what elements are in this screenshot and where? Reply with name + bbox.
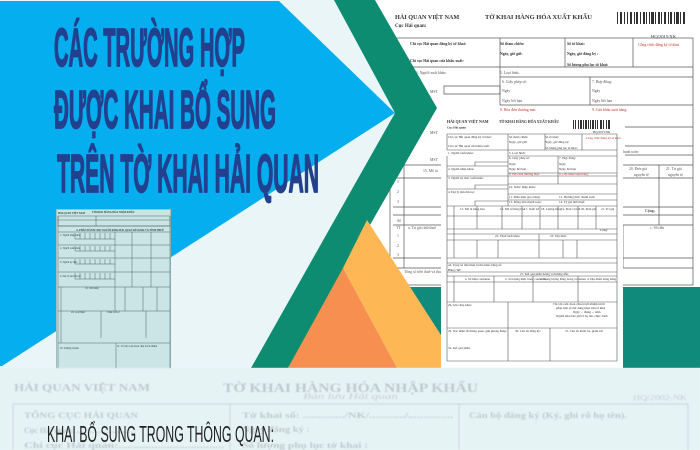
document: export declaration, front sheet: b. Số lượng kiện trong container [505, 277, 547, 281]
document: export declaration, front sheet: 22. Thuế xuất khẩu [495, 233, 520, 238]
bottom panel: import declaration, faded: TỜ KHAI HÀNG HÓA NHẬP KHẨU [223, 380, 478, 395]
document: export declaration, back sheet: 15. Mô tả [423, 169, 438, 173]
document: export declaration, front sheet: c. Trọng lượng hàng trong container [540, 277, 587, 281]
document: export declaration, back sheet: nguyên tệ [634, 173, 649, 177]
document: export declaration, back sheet: 9. Cửa khẩu xuất hàng: [592, 107, 627, 112]
document: export declaration, front sheet: Ngày [559, 162, 566, 166]
document: export declaration, front sheet: Ngày ... tháng ... năm [573, 310, 601, 314]
document: export declaration, front sheet: 17. Xuất xứ [524, 207, 539, 211]
document: export declaration, front sheet: 20. Đơn giá [581, 207, 597, 211]
text: ĐƯỢC KHAI BỔ SUNG [54, 80, 276, 140]
document: export declaration, front sheet: 11. Điều kiện giao hàng: [509, 195, 540, 199]
thumbnail: customs form photo: HẢI QUAN VIỆT NAM [58, 212, 85, 215]
document: export declaration, front sheet: 14. Tỷ giá tính thuế: [559, 200, 585, 204]
document: export declaration, front sheet: 24. Tổng số tiền thuế và thu khác bằng số: [448, 262, 502, 267]
yellow triangle [343, 220, 441, 368]
document: export declaration, front sheet: 31. Cán bộ kiểm tra, giám sát: [565, 328, 604, 334]
document: export declaration, back sheet [370, 0, 700, 287]
document: export declaration, front sheet: Số tờ khai: [545, 135, 559, 139]
document: export declaration, front sheet: Bằng chữ: [448, 267, 461, 272]
document: export declaration, front sheet: 29. Xác nhận đã thông quan, giải phóng hàng: [448, 329, 507, 334]
document: export declaration, front sheet: 19. Đơn vị tính [561, 207, 581, 211]
document: export declaration, back sheet: Chi cục Hải quan cửa khẩu xuất: [410, 58, 464, 63]
document: export declaration, back sheet: Ngày [502, 89, 510, 93]
document: export declaration, back sheet: 3 [397, 253, 399, 257]
thumbnail: customs form photo: 2. Người xuất khẩu [60, 247, 81, 250]
document: export declaration, back sheet: c. Số tiền [650, 226, 664, 230]
document: export declaration, front sheet: 23. Thu khác [550, 234, 567, 238]
document: export declaration, front sheet: 7. Hợp đồng: [559, 156, 576, 160]
document: export declaration, front sheet: 3. Người ủy thác xuất khẩu: [448, 175, 484, 180]
document: export declaration, front sheet: 9. Cửa khẩu xuất hàng: [559, 171, 589, 176]
document: export declaration, back sheet: 2 [397, 244, 399, 248]
document: export declaration, back sheet: 7. Hợp đồng: [592, 80, 612, 84]
document: export declaration, back sheet: Chi cục Hải quan đăng ký tờ khai: [410, 42, 466, 46]
teal block: behind triangles [405, 287, 441, 368]
document: export declaration, front sheet: Chi cục Hải quan cửa khẩu xuất: [448, 143, 490, 148]
document: export declaration, back sheet: TỜ KHAI HÀNG HÓA XUẤT KHẨU [485, 13, 593, 21]
orange triangle [288, 268, 397, 368]
document: export declaration, back sheet: Cộng: [645, 209, 655, 213]
bottom panel: import declaration, faded: Tờ khai số: ............../NK/............/............... [242, 411, 453, 420]
document: export declaration, back sheet: 1. Người xuất khẩu: [416, 70, 446, 75]
document: export declaration, back sheet: MST [430, 90, 438, 94]
document: export declaration, back sheet: Tổng số tiền thuế và thu khác [404, 269, 449, 274]
document: export declaration, front sheet: 12. Phương thức thanh toán: [559, 195, 595, 199]
document: export declaration, back sheet: 20. Đơn giá [629, 167, 647, 171]
document: export declaration, front sheet: 4. Đại lý làm thủ tục: [448, 190, 475, 194]
thumbnail: customs form photo: 3. Người ủy thác [60, 261, 78, 264]
bottom panel: import declaration, faded: HẢI QUAN VIỆT NAM [14, 381, 151, 394]
document: export declaration, front sheet: Tôi xin cam đoan chịu trách nhiệm trước [553, 302, 606, 306]
document: export declaration, back sheet: nguyên tệ [668, 173, 683, 177]
bottom panel: import declaration, faded: Chi cục Hải quan:................................... [24, 441, 224, 450]
document: export declaration, front sheet: Ngày, giờ gửi: [509, 140, 527, 145]
thumbnail: customs form photo: TỜ KHAI HÀNG HÓA NHẬP KHẨU [92, 210, 135, 214]
document: export declaration, back sheet: Số tờ khai: [567, 42, 585, 46]
document: export declaration, back sheet: 1 [397, 234, 399, 238]
document: export declaration, back sheet: HQ/2015/XK [651, 34, 677, 39]
thumbnail: customs form photo: 4. Đại lý làm thủ tục [60, 275, 82, 278]
title [54, 18, 319, 204]
green chevron [251, 0, 437, 368]
bottom panel: import declaration, faded: Ngày đăng ký : [242, 425, 310, 434]
bottom panel: import declaration, faded: Cán bộ đăng ký (Ký, ghi rõ họ tên). [469, 411, 627, 420]
document: export declaration, back sheet: Số tham chiếu: [500, 42, 524, 46]
thumbnail: customs form photo: 28. Loại thuế [71, 311, 86, 314]
document: export declaration, back sheet: 1 [397, 180, 399, 184]
document: export declaration, back sheet: 3 [397, 200, 399, 204]
teal block: right [623, 287, 700, 368]
document: export declaration, front sheet: HẢI QUAN VIỆT NAM [447, 119, 489, 124]
document: export declaration, front sheet: Số lượng phụ lục tờ khai: [545, 146, 578, 150]
document: export declaration, front sheet: Ngày hết hạn [509, 167, 526, 171]
document: export declaration, front sheet: a. Số hiệu container [465, 277, 491, 281]
thumbnail: customs form photo: A. PHẦN DÀNH CHO NGƯỜI KHAI HẢI QUAN KÊ KHAI VÀ TÍNH THUẾ [76, 229, 164, 232]
document: export declaration, front sheet: 18. Lượng hàng [541, 207, 562, 211]
document: export declaration, front sheet: 13. Đồng tiền thanh toán: [509, 200, 542, 204]
document: export declaration, back sheet: a. Trị giá tính thuế [408, 226, 436, 230]
document: export declaration, back sheet: Ngày hết hạn [592, 99, 612, 103]
document: export declaration, front sheet: 27. Kết quả phân luồng và hướng dẫn: [520, 271, 569, 276]
document: export declaration, front sheet: Công chức đăng ký tờ khai [586, 136, 621, 140]
thumbnail: customs form photo: 18. Tên hàng [85, 287, 99, 290]
document: export declaration, front sheet: 30. Cán bộ đăng ký: [515, 329, 541, 333]
blue arrow panel [0, 1, 395, 366]
document: export declaration, back sheet: Ngày hết hạn [502, 99, 522, 103]
bottom panel: import declaration, faded: Cục Hải quan: .............................. [24, 426, 136, 435]
document: export declaration, front sheet: d. Địa điểm đóng hàng [587, 276, 617, 281]
document: export declaration, front sheet: Ngày hết hạn [559, 167, 576, 171]
thumbnail: customs form photo: 31. Tôi xin cam đoan chịu trách nhiệm [117, 345, 157, 348]
document: export declaration, back sheet: HẢI QUAN VIỆT NAM [395, 13, 459, 21]
title: CÁC TRƯỜNG HỢP [54, 18, 245, 78]
document: export declaration, front sheet: Cục Hải quan [447, 126, 466, 130]
document: export declaration, front sheet: 32. Kết quả phân: [448, 346, 471, 350]
document: export declaration, back sheet: Ngày, giờ gửi: [500, 52, 523, 56]
document: export declaration, front sheet: Người khai báo ghi rõ họ tên, chức danh [556, 314, 608, 319]
document: export declaration, back sheet: 6. Giấy phép số: [502, 80, 527, 84]
thumbnail: customs form photo: 1. Người nhập khẩu [60, 234, 81, 237]
thumbnail: customs form photo: 30. Chứng từ kèm [60, 347, 79, 350]
document: export declaration, front sheet: pháp luật về nội dung khai trên tờ khai [556, 306, 605, 310]
document: export declaration, front sheet: Chi cục Hải quan đăng ký tờ khai: [448, 135, 492, 139]
barcode: front sheet [573, 120, 610, 129]
document: export declaration, back sheet: Công chức đăng ký tờ khai [638, 43, 679, 47]
document: export declaration, back sheet: 8. Hóa đơn thương mại: [500, 108, 536, 112]
bottom panel: import declaration, faded: Số lượng phụ lục tờ khai : [242, 441, 368, 450]
document: export declaration, front sheet: 16. Mã số hàng hóa [500, 207, 526, 211]
document: export declaration, back sheet: TT [396, 226, 401, 230]
document: export declaration, front sheet: HQ/2015/XK [593, 130, 611, 134]
document: export declaration, front sheet: 21. Trị giá [601, 207, 615, 211]
thumbnail: customs form photo: Thuế GTGT [107, 311, 120, 314]
document: export declaration, front sheet: 5. Loại hình: [509, 151, 525, 155]
document: export declaration, back sheet: Cục Hải quan: [395, 24, 427, 29]
document: export declaration, front sheet: 15. Mô tả hàng hóa [460, 207, 485, 211]
caption: KHAI BỔ SUNG TRONG THÔNG QUAN: [47, 420, 274, 447]
document: export declaration, back sheet: MST [430, 131, 438, 135]
document: export declaration, back sheet: 5. Loại hình: [500, 71, 520, 75]
document: export declaration, front sheet: TỜ KHAI HÀNG HÓA XUẤT KHẨU [499, 119, 559, 124]
barcode: export sheet [617, 12, 685, 24]
document: export declaration, back sheet: Ngày [592, 89, 600, 93]
document: export declaration, front sheet: 1. Người xuất khẩu: [448, 150, 474, 155]
document: export declaration, front sheet: Ngày [509, 162, 516, 166]
document: export declaration, front sheet: 6. Giấy phép số: [509, 156, 530, 160]
document: export declaration, back sheet: Số lượng phụ lục tờ khai: [567, 63, 608, 67]
document: export declaration, back sheet: 21. Trị giá [666, 167, 682, 171]
bottom panel: import declaration, faded: TỔNG CỤC HẢI QUAN [24, 410, 138, 420]
document: export declaration, back sheet: 2 [397, 190, 399, 194]
document: export declaration, front sheet: Số tham chiếu: [509, 135, 528, 139]
document: export declaration, back sheet: MST [430, 158, 438, 162]
document: export declaration, front sheet [441, 113, 623, 368]
document: export declaration, front sheet: Cộng: [600, 228, 608, 232]
document: export declaration, back sheet: Ngày, giờ đăng ký : [567, 52, 598, 56]
document: export declaration, back sheet: Số [397, 219, 401, 223]
document: export declaration, front sheet: 2. Người nhập khẩu: [448, 166, 474, 171]
document: export declaration, front sheet: 10. Nước nhập khẩu: [509, 184, 536, 189]
document: export declaration, front sheet: 8. Hóa đơn thương mại: [509, 172, 540, 176]
bottom panel: import declaration, faded: Bản lưu Hải quan [303, 391, 398, 401]
bottom panel: import declaration, faded: HQ/2002-NK [633, 393, 688, 402]
pale area inside chevron [0, 0, 395, 368]
bottom panel: import declaration, faded [0, 368, 700, 450]
thumbnail: customs form photo [56, 209, 171, 371]
document: export declaration, front sheet: 26. Ghi chép khác: [448, 303, 472, 307]
document: export declaration, front sheet: Ngày, giờ đăng ký: [545, 140, 569, 145]
document: export declaration, back sheet: hanh toán: [623, 150, 639, 154]
